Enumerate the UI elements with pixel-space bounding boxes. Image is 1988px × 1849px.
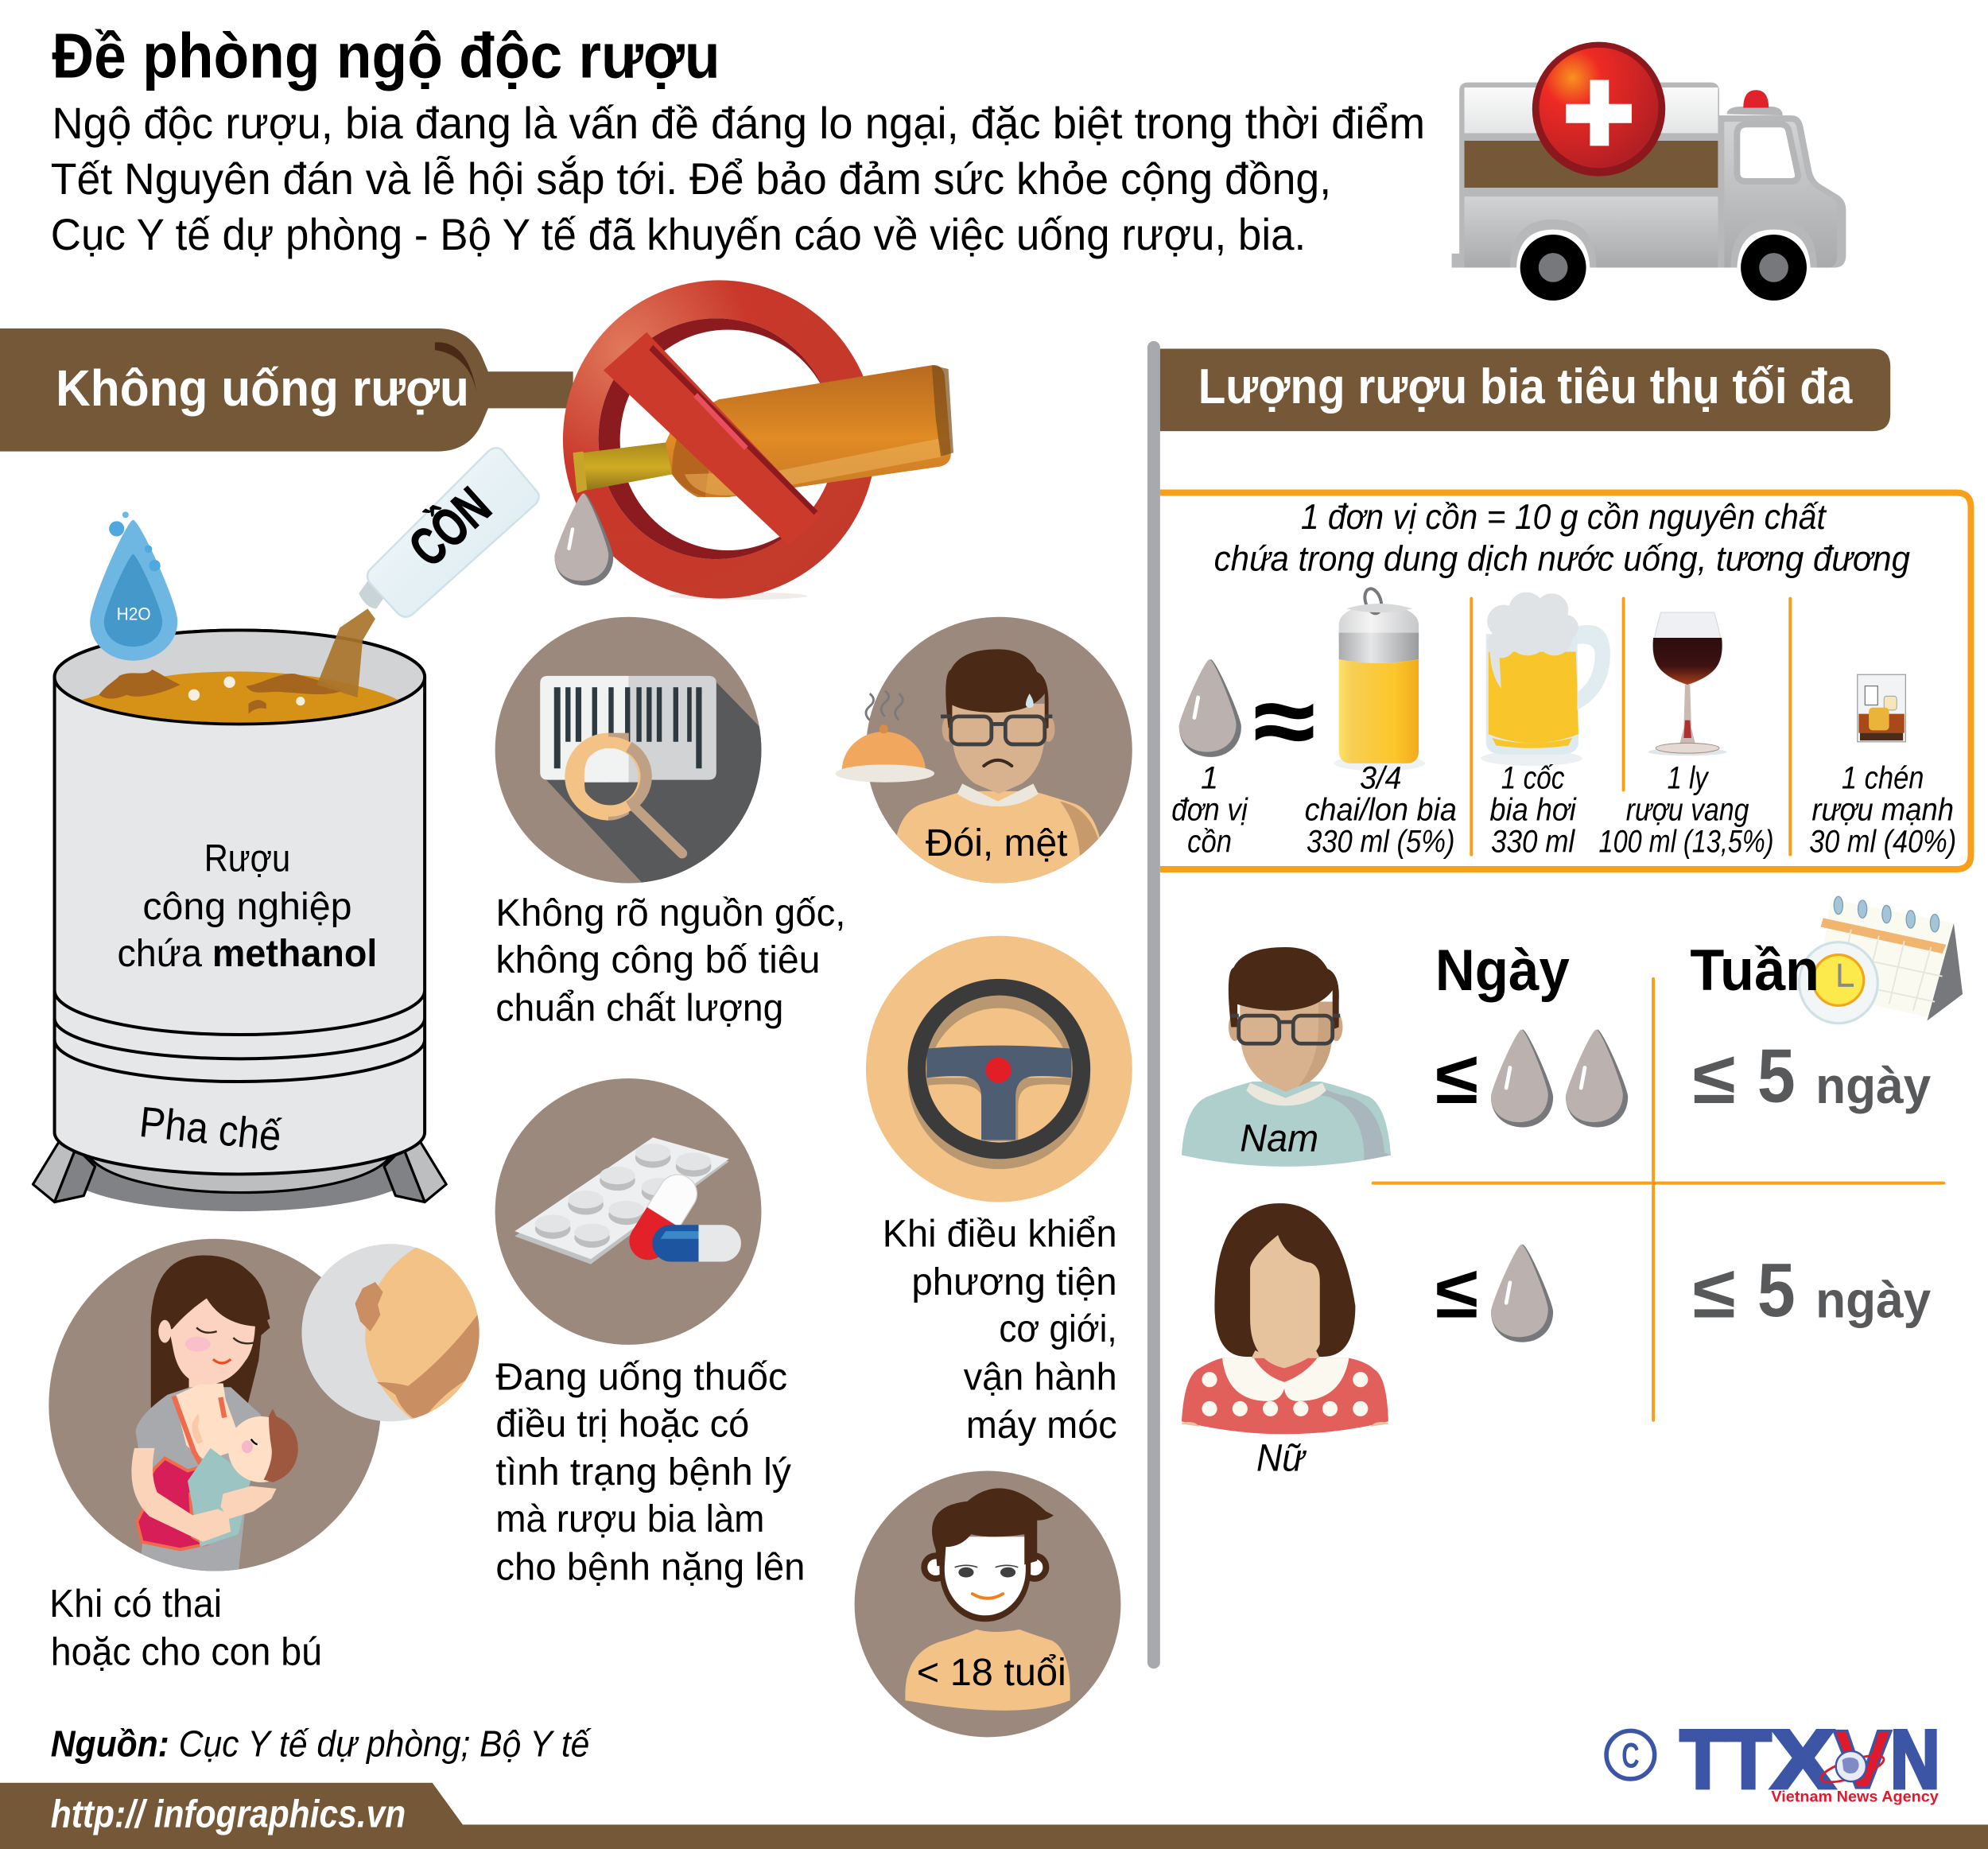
drink labels: cồn — [1187, 824, 1232, 859]
text: unknown origin — [495, 892, 845, 1030]
tank text: methanol: công nghiệp — [142, 886, 351, 928]
panel: industrial alcohol tank — [33, 608, 446, 1211]
icon: whisky glass — [1858, 674, 1905, 742]
text: driving: phương tiện — [911, 1261, 1117, 1303]
footer banner — [0, 1783, 1988, 1849]
icon: food cloche — [836, 691, 934, 783]
icon: man figure — [1182, 947, 1391, 1167]
drink labels: 330 ml — [1491, 824, 1575, 859]
logo: TTXVN: Vietnam News Agency — [1771, 1789, 1939, 1806]
panel: alcohol unit box — [1160, 492, 1971, 869]
label: female: Nữ — [1256, 1438, 1307, 1480]
logo: copyright mark — [1606, 1731, 1655, 1779]
icon: pregnant belly circle — [301, 1244, 492, 1423]
icon: breastfeeding mother circle — [49, 1239, 381, 1572]
liquid in tank — [81, 670, 398, 723]
text: medication: cho bệnh nặng lên — [495, 1547, 805, 1589]
male weekly limit — [1693, 1034, 1932, 1119]
icon: alcohol tube — [359, 448, 539, 617]
text: medication: mà rượu bia làm — [495, 1498, 764, 1540]
icon: beer can — [1334, 587, 1425, 771]
logo: TTXVN — [1680, 1713, 1939, 1806]
definition text — [1214, 498, 1910, 579]
text: medication: tình trạng bệnh lý — [495, 1451, 791, 1494]
liquid pouring from tube — [317, 608, 375, 697]
footer banner: http:// infographics.vn — [51, 1793, 406, 1836]
icon: no-alcohol sign with bottle — [563, 280, 953, 600]
divider — [1789, 599, 1792, 855]
icon: drop — [1491, 1245, 1553, 1342]
column heading: week: Tuần — [1690, 938, 1819, 1003]
icon: ambulance — [1452, 42, 1846, 301]
icon: unit drop — [1179, 659, 1241, 757]
icon: red cross badge — [1532, 42, 1665, 177]
definition text: 1 đơn vị cồn = 10 g cồn nguyên chất — [1301, 498, 1827, 537]
drink labels: 3/4 — [1360, 761, 1402, 796]
icon: steering wheel circle — [866, 936, 1132, 1202]
icon: hungry tired man circle — [836, 617, 1132, 888]
tank text: methanol: chứa methanol — [117, 933, 377, 975]
panel: khong uong ruou heading: Không uống rượu — [56, 359, 469, 417]
tank text: methanol: Rượu — [204, 837, 290, 880]
drink labels: 1 cốc — [1501, 761, 1565, 796]
text: driving — [883, 1213, 1117, 1447]
logo: copyright mark: C — [1621, 1737, 1640, 1776]
icon: under 18 boy circle — [855, 1471, 1120, 1737]
male weekly limit: ≤ — [1693, 1036, 1736, 1119]
icon: wine glass — [1648, 612, 1727, 756]
text: driving: máy móc — [966, 1404, 1117, 1447]
intro paragraph — [51, 98, 1425, 259]
icon: barcode circle — [495, 617, 774, 888]
icon: drop 2 — [1566, 1030, 1628, 1127]
label: male: Nam — [1240, 1118, 1318, 1160]
vertical divider — [1147, 341, 1160, 1668]
text: driving: Khi điều khiển — [883, 1213, 1117, 1255]
drink labels: 30 ml (40%) — [1809, 824, 1956, 859]
drink labels: 1 ly — [1668, 761, 1709, 796]
divider — [1622, 599, 1625, 790]
text: medication — [495, 1356, 805, 1589]
male daily limit: ≤ — [1435, 1036, 1478, 1119]
drink labels: bia hơi — [1489, 793, 1577, 828]
logo: TTXVN: V — [1833, 1713, 1892, 1805]
intro paragraph: Cục Y tế dự phòng - Bộ Y tế đã khuyến cáo về việc uống rượu, bia. — [51, 209, 1306, 259]
drink labels: chai/lon bia — [1305, 793, 1457, 828]
text: pregnancy: hoặc cho con bú — [51, 1630, 322, 1673]
drink labels: 1 chén — [1842, 761, 1924, 796]
label: hungry tired: Đói, mệt — [926, 822, 1067, 864]
female weekly limit — [1693, 1248, 1932, 1334]
source note: Nguồn: Cục Y tế dự phòng; Bộ Y tế — [51, 1723, 592, 1764]
table cross lines — [1373, 979, 1943, 1420]
text: medication: Đang uống thuốc — [495, 1356, 787, 1398]
drink labels — [1171, 761, 1956, 859]
logo: TTXVN: N — [1890, 1713, 1939, 1805]
icon: calendar and clock — [1799, 896, 1963, 1024]
title: Đề phòng ngộ độc rượu — [52, 20, 720, 91]
female daily limit — [1435, 1245, 1553, 1342]
logo: TTXVN: T — [1680, 1713, 1726, 1805]
male weekly limit: 5 — [1757, 1034, 1796, 1119]
drink labels: 330 ml (5%) — [1307, 824, 1455, 859]
female weekly limit: ngày — [1815, 1272, 1932, 1329]
drink labels: rượu mạnh — [1811, 793, 1954, 828]
intro paragraph: Tết Nguyên đán và lễ hội sắp tới. Để bảo đảm sức khỏe cộng đồng, — [51, 153, 1331, 204]
male daily limit — [1435, 1030, 1628, 1127]
divider — [1470, 599, 1473, 855]
text: unknown origin: Không rõ nguồn gốc, — [495, 892, 845, 934]
panel: maximum consumption heading: Lượng rượu bia tiêu thụ tối đa — [1198, 359, 1853, 414]
drink labels: đơn vị — [1171, 793, 1248, 828]
icon: draft beer mug — [1481, 592, 1610, 766]
tank label: pha che: Pha chế — [138, 1098, 283, 1160]
male weekly limit: ngày — [1815, 1057, 1932, 1114]
female daily limit: ≤ — [1435, 1251, 1478, 1334]
icon: pills circle — [495, 1078, 761, 1345]
intro paragraph: Ngộ độc rượu, bia đang là vấn đề đáng lo ngại, đặc biệt trong thời điểm — [52, 98, 1425, 148]
tank text: methanol — [117, 837, 377, 975]
female weekly limit: 5 — [1757, 1248, 1796, 1333]
panel: khong uong ruou heading — [0, 328, 573, 452]
definition text: chứa trong dung dịch nước uống, tương đương — [1214, 540, 1910, 579]
icon: H2O water drop: H2O — [117, 604, 151, 624]
label: under 18: < 18 tuổi — [917, 1652, 1066, 1694]
logo: TTXVN: X — [1771, 1713, 1835, 1805]
drink labels: 100 ml (13,5%) — [1599, 824, 1774, 859]
icon: alcohol drop under bottle — [554, 493, 613, 585]
icon: alcohol tube: CỒN — [398, 476, 502, 578]
text: pregnancy — [49, 1582, 322, 1673]
icon: woman figure — [1182, 1203, 1388, 1480]
approximately equal sign: ≈ — [1254, 669, 1314, 774]
text: unknown origin: không công bố tiêu — [495, 939, 821, 981]
icon: H2O water drop — [90, 511, 177, 661]
text: driving: vận hành — [964, 1356, 1117, 1398]
logo: TTXVN: T — [1726, 1713, 1771, 1805]
drink labels: rượu vang — [1626, 793, 1749, 828]
text: pregnancy: Khi có thai — [49, 1582, 222, 1626]
text: driving: cơ giới, — [999, 1308, 1117, 1350]
drink labels: 1 — [1201, 761, 1218, 796]
icon: drop 1 — [1491, 1030, 1553, 1127]
female weekly limit: ≤ — [1693, 1251, 1736, 1334]
panel: maximum consumption heading — [1160, 348, 1890, 431]
text: medication: điều trị hoặc có — [495, 1403, 749, 1445]
column heading: day: Ngày — [1435, 938, 1570, 1003]
text: unknown origin: chuẩn chất lượng — [495, 988, 783, 1030]
